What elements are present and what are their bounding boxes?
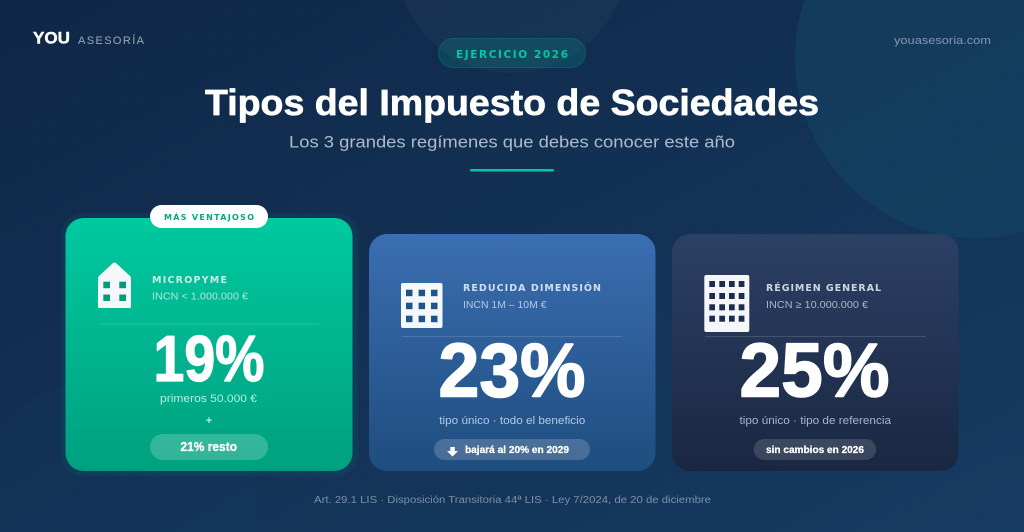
pill: sin cambios [754, 439, 876, 460]
icon: large building [704, 275, 749, 332]
logo [33, 28, 145, 48]
micropyme heading: MICROPYME [152, 275, 227, 286]
rate note: tipo único · tipo de referencia [740, 415, 892, 427]
title: Tipos del Impuesto de Sociedades [205, 82, 819, 123]
badge: más ventajoso [150, 205, 268, 228]
panel: régimen general [672, 234, 958, 471]
pill: sin cambios: sin cambios en 2026 [766, 445, 864, 456]
rate note: tipo único · todo el beneficio [439, 415, 585, 427]
reducida dimensión heading: REDUCIDA DIMENSIÓN [463, 282, 601, 294]
rate 23%: 23% [438, 328, 586, 414]
rate 19%: 19% [154, 323, 264, 395]
rate 25%: 25% [740, 328, 890, 414]
pill: 21% resto [150, 434, 268, 460]
icon: down arrow [447, 447, 458, 456]
accent line [470, 169, 554, 172]
plus sign: + [206, 415, 212, 427]
badge: más ventajoso: MÁS VENTAJOSO [164, 211, 254, 222]
icon: small house [98, 262, 131, 308]
logo: ASESORÍA [78, 34, 145, 47]
régimen general heading: RÉGIMEN GENERAL [766, 282, 881, 294]
icon: medium building [401, 283, 442, 328]
micropyme threshold: INCN < 1.000.000 € [152, 290, 248, 302]
pill: 21% resto: 21% resto [180, 440, 237, 454]
logo: YOU [33, 28, 70, 48]
pill: bajará al 20% [434, 439, 590, 460]
panel: reducida dimensión [369, 234, 656, 471]
subtitle: Los 3 grandes regímenes que debes conocer este año [289, 134, 735, 152]
reducida dimensión threshold: INCN 1M – 10M € [463, 299, 547, 311]
panel: micropyme [61, 205, 358, 476]
footer legal references: Art. 29.1 LIS · Disposición Transitoria 44ª LIS · Ley 7/2024, de 20 de diciembre [314, 495, 711, 506]
badge: ejercicio 2026 [438, 38, 586, 68]
badge: ejercicio 2026: EJERCICIO 2026 [456, 49, 568, 61]
pill: bajará al 20%: bajará al 20% en 2029 [465, 445, 569, 456]
rate note: primeros 50.000 € [160, 393, 257, 405]
régimen general threshold: INCN ≥ 10.000.000 € [766, 299, 868, 311]
website: youasesoria.com [894, 35, 991, 47]
